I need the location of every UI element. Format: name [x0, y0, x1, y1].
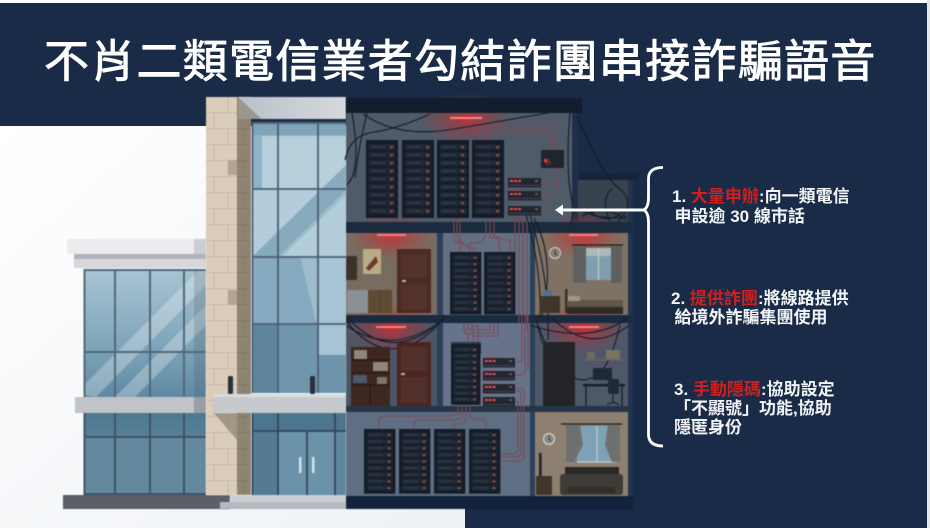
second floor server racks — [450, 252, 515, 314]
step 2 text: 2. 提供詐團:將線路提供 — [671, 288, 849, 308]
ground floor living room — [536, 424, 623, 495]
curly brace — [644, 168, 663, 446]
third floor bookcase — [351, 347, 390, 406]
red ceiling light glows — [347, 92, 627, 354]
step 1 text: 1. 大量申辦:向一類電信 — [672, 186, 850, 206]
step 1 text — [672, 186, 850, 226]
ceiling light bars — [376, 117, 599, 328]
step 2 text: 給境外詐騙集團使用 — [674, 307, 828, 327]
glass atrium — [214, 97, 346, 509]
floor slabs and roof — [346, 98, 633, 509]
third floor office — [543, 342, 625, 406]
rooms — [346, 113, 628, 496]
second floor right bedroom — [540, 245, 623, 314]
title: 不肖二類電信業者勾結詐團串接詐騙語音 — [44, 36, 877, 87]
left wing of building — [63, 239, 230, 509]
central brick tower — [206, 97, 251, 495]
step 2 text — [671, 288, 849, 327]
ground floor server racks — [364, 429, 500, 494]
third floor door — [397, 342, 431, 406]
white arrow pointing to the switches — [555, 204, 646, 216]
step 3 text: 隱匿身份 — [674, 418, 742, 437]
third floor server rack and switches — [451, 342, 515, 409]
step 1 text: 申設逾 30 線市話 — [674, 206, 805, 226]
step 3 text — [674, 379, 835, 437]
second floor left room furniture — [346, 249, 392, 313]
server building cross-section — [345, 92, 639, 509]
top floor network switches — [505, 175, 541, 218]
top floor electrical panel — [541, 150, 564, 168]
black loose cables — [345, 113, 628, 380]
step 3 text: 3. 手動隱碼:協助設定 — [674, 379, 835, 399]
annex shell — [575, 173, 639, 502]
second floor door — [397, 249, 431, 313]
red data cables — [379, 125, 558, 461]
step 3 text: 「不顯號」功能,協助 — [674, 399, 832, 418]
top floor server racks — [366, 140, 504, 218]
